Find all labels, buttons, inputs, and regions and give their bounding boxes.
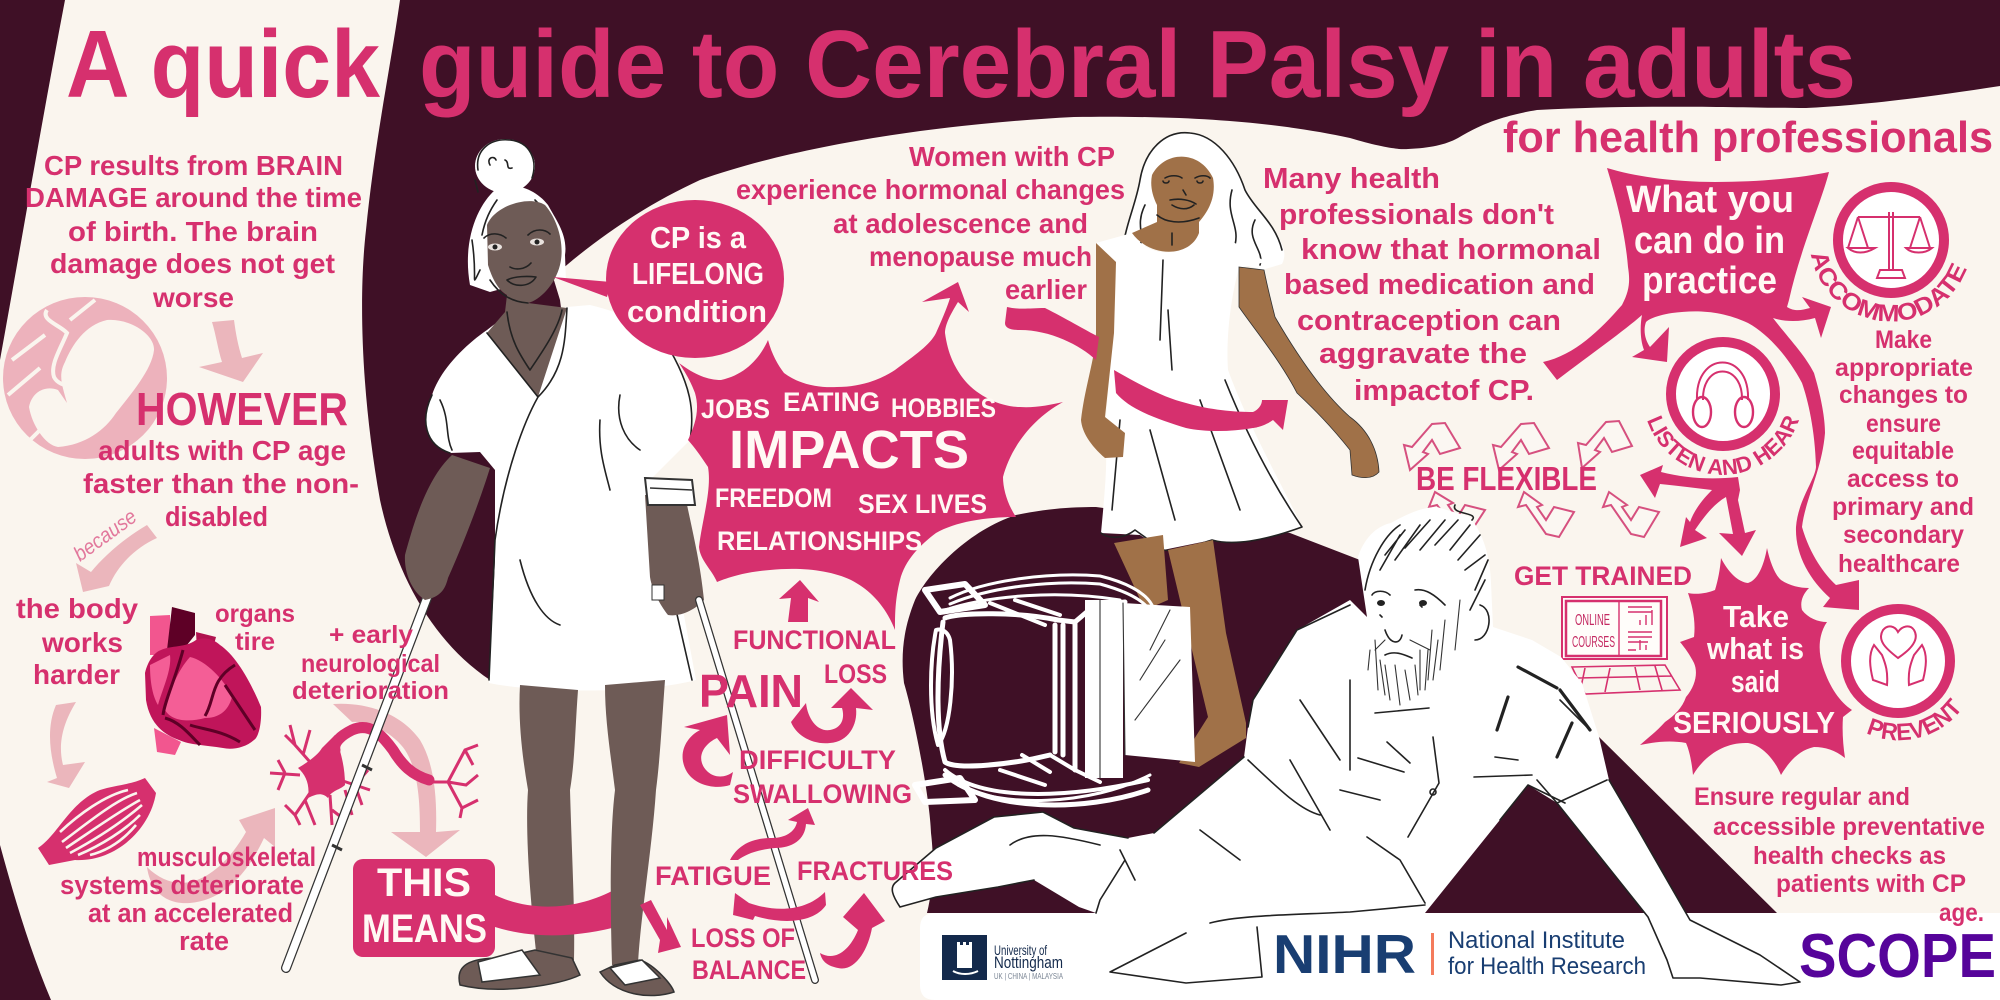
- burst: impacts: FREEDOM: [715, 483, 832, 513]
- text: make appropriate changes: access to: [1847, 465, 1959, 493]
- dress: [1096, 233, 1302, 550]
- text: musculoskeletal: rate: [179, 926, 229, 956]
- icon: prevent heart and hands: [1846, 609, 1950, 713]
- leg: right: [1168, 540, 1246, 767]
- logo: NIHR: National Institute: [1448, 927, 1625, 954]
- burst: take what is said seriously: what is: [1706, 631, 1804, 666]
- logo: NIHR: NIHR: [1273, 923, 1416, 985]
- text: adults age faster: faster than the non-: [83, 468, 359, 499]
- impacts flow list: DIFFICULTY: [739, 745, 896, 775]
- text: many health professionals: Many health: [1263, 163, 1440, 195]
- leg: left: [519, 685, 578, 960]
- text: women with CP: at adolescence and: [833, 208, 1088, 239]
- arrow: this means band: [495, 891, 612, 935]
- bubble: CP is a lifelong condition: [553, 200, 784, 358]
- burst: take what is said seriously: SERIOUSLY: [1673, 705, 1835, 740]
- text: CP results: damage does not get: [50, 248, 335, 279]
- text: make appropriate changes: secondary: [1843, 521, 1964, 549]
- text: organs tire: tire: [235, 628, 275, 656]
- logo: NIHR: for Health Research: [1448, 953, 1646, 980]
- text: early neurological deterioration: [292, 621, 449, 705]
- text: women with CP: earlier: [1005, 274, 1087, 305]
- arrow: because: [69, 505, 157, 592]
- man outline and clothing lines: [892, 605, 1800, 985]
- text: the body works harder: works: [41, 627, 123, 658]
- arm: left: [1081, 243, 1125, 458]
- text: ensure regular: Ensure regular and: [1694, 783, 1910, 811]
- text: make appropriate changes: healthcare: [1838, 550, 1960, 578]
- text: the body works harder: [16, 593, 138, 690]
- text: many health professionals: professionals don't: [1279, 199, 1554, 231]
- impacts flow list: [655, 580, 953, 985]
- label: get trained: GET TRAINED: [1514, 561, 1692, 591]
- text: adults age faster: adults with CP age: [98, 435, 346, 466]
- text: make appropriate changes: Make: [1875, 326, 1932, 354]
- figure: wheelchair: [915, 575, 1195, 805]
- burst: impacts: [679, 282, 1063, 630]
- burst: impacts: JOBS: [701, 394, 770, 424]
- impacts flow list: FRACTURES: [797, 856, 953, 886]
- impacts flow list: FUNCTIONAL: [733, 625, 896, 655]
- box: what you can do in practice: What you: [1626, 179, 1794, 221]
- text: CP results: DAMAGE around the time: [25, 182, 362, 213]
- box: this means: MEANS: [362, 907, 487, 951]
- sandals: [459, 950, 674, 996]
- text: early neurological deterioration: neurological: [301, 650, 440, 678]
- impacts flow list: PAIN: [699, 665, 803, 717]
- arc guides: [1647, 252, 1971, 740]
- text: make appropriate changes: equitable: [1852, 437, 1954, 465]
- text: ensure regular: accessible preventative: [1713, 813, 1985, 841]
- text: adults age faster: [83, 435, 359, 532]
- burst: take what is said seriously: [1640, 548, 1852, 775]
- text: many health professionals: know that hormonal: [1301, 234, 1601, 266]
- text: CP results: CP results from BRAIN: [44, 150, 343, 181]
- icon: laptop online courses: [1562, 597, 1680, 694]
- arrow: neuron to this means: [333, 704, 460, 857]
- text: make appropriate changes: changes to: [1839, 381, 1968, 409]
- box: this means: [353, 859, 495, 957]
- text: many health professionals: [1263, 163, 1601, 407]
- arm: left: [405, 455, 490, 600]
- arrow: down to however: [199, 320, 263, 382]
- arrow: because: because: [69, 505, 141, 566]
- impacts flow list: BALANCE: [692, 955, 806, 985]
- text: early neurological deterioration: deterioration: [292, 677, 449, 705]
- bubble: CP is a lifelong condition: condition: [627, 294, 767, 329]
- figure: woman with crutches: [286, 139, 815, 996]
- hair: [1123, 133, 1284, 270]
- text: ensure regular: [1694, 783, 1985, 927]
- text: many health professionals: contraception can: [1297, 305, 1561, 337]
- text: musculoskeletal: musculoskeletal: [137, 842, 316, 872]
- text: make appropriate changes: appropriate: [1835, 354, 1973, 382]
- icons: flexible arrows: [1404, 421, 1659, 537]
- logo band: [920, 913, 2000, 1000]
- arrow: up to impacts: [779, 580, 819, 622]
- dress lines: [426, 308, 692, 680]
- dress: [426, 305, 696, 690]
- text: ensure regular: age.: [1939, 899, 1984, 927]
- burst: impacts: RELATIONSHIPS: [717, 526, 922, 556]
- icon: listen headphones: [1671, 342, 1775, 446]
- crutch: left: [286, 577, 435, 968]
- text: musculoskeletal: at an accelerated: [88, 898, 293, 928]
- face and neck: [1132, 157, 1214, 252]
- text: women with CP: Women with CP: [909, 141, 1115, 172]
- text: CP results: worse: [152, 282, 234, 313]
- arm: right and hand: [1239, 267, 1379, 478]
- impacts flow list: SWALLOWING: [733, 779, 912, 809]
- arrow: hormonal: [1005, 307, 1288, 431]
- text: women with CP: [736, 141, 1125, 305]
- impacts flow list: LOSS: [824, 659, 887, 689]
- box: what you can do in practice: [1543, 168, 1859, 610]
- text: women with CP: menopause much: [869, 241, 1092, 272]
- box: what you can do in practice: can do in: [1634, 220, 1785, 262]
- arm: right with cuff: [645, 478, 704, 615]
- text: organs tire: organs: [215, 600, 295, 628]
- figure: woman with white hair: [1005, 133, 1379, 767]
- text: many health professionals: based medication and: [1284, 269, 1595, 301]
- hair: [468, 139, 566, 292]
- text: CP results: [25, 150, 362, 313]
- arrow: body to muscle: [47, 702, 85, 788]
- text: musculoskeletal: [60, 842, 316, 956]
- icon: muscle: [38, 778, 156, 865]
- arrows: three way: [1640, 465, 1756, 556]
- text: CP results: of birth. The brain: [68, 216, 318, 247]
- icon: laptop online courses: ONLINE: [1575, 612, 1610, 629]
- text: ensure regular: patients with CP: [1776, 870, 1966, 898]
- text: adults age faster: disabled: [165, 501, 268, 532]
- leg: left: [1114, 535, 1168, 610]
- text: make appropriate changes: primary and: [1832, 493, 1974, 521]
- icon: fetus: [3, 297, 167, 459]
- logo: University of Nottingham: UK | CHINA | MALAYSIA: [994, 972, 1064, 981]
- title: guide to Cerebral Palsy in adults: [419, 11, 1856, 118]
- arrow: this means to loss of balance: [640, 900, 681, 953]
- box: what you can do in practice: practice: [1642, 260, 1777, 302]
- impacts flow list: LOSS OF: [691, 923, 795, 953]
- text: ensure regular: health checks as: [1753, 842, 1946, 870]
- leg: right: [605, 680, 665, 965]
- label: listen and hear: LISTEN AND HEAR: [1647, 415, 1800, 475]
- bubble: CP is a lifelong condition: LIFELONG: [632, 256, 764, 291]
- text: early neurological deterioration: + early: [329, 621, 413, 649]
- man hair, face and beard: [1365, 505, 1489, 705]
- text: the body works harder: harder: [33, 659, 120, 690]
- label: accommodate: ACCOMMODATE: [1810, 254, 1967, 322]
- logo: University of Nottingham: [942, 935, 1064, 981]
- subtitle: for health professionals: [1503, 113, 1993, 162]
- title: A quick: [66, 11, 381, 118]
- text: many health professionals: impactof CP.: [1354, 375, 1534, 407]
- figure: man on floor: [892, 505, 1800, 985]
- text: musculoskeletal: systems deteriorate: [60, 870, 304, 900]
- icon: heart: [145, 607, 261, 755]
- burst: impacts: SEX LIVES: [858, 489, 987, 519]
- heading: however: HOWEVER: [136, 383, 348, 435]
- logo: University of Nottingham: Nottingham: [994, 953, 1063, 972]
- text: the body works harder: the body: [16, 593, 138, 624]
- burst: impacts: HOBBIES: [891, 393, 996, 423]
- head and chest: [487, 201, 567, 397]
- bubble: CP is a lifelong condition: CP is a: [650, 220, 747, 255]
- text: many health professionals: aggravate the: [1319, 338, 1527, 370]
- text: organs tire: [215, 600, 295, 656]
- box: this means: THIS: [377, 861, 471, 905]
- logo: University of Nottingham: University of: [994, 942, 1047, 958]
- impacts flow list: FATIGUE: [655, 861, 771, 891]
- arrow: muscle to neuron: [147, 808, 275, 903]
- face: [484, 230, 562, 370]
- label: be flexible: BE FLEXIBLE: [1416, 460, 1597, 497]
- label: prevent: PREVENT: [1867, 697, 1960, 740]
- icon: neuron: [270, 725, 478, 825]
- logo: NIHR: [1273, 923, 1646, 985]
- icon: accommodate scales: [1838, 187, 1944, 293]
- text: make appropriate changes: ensure: [1866, 410, 1941, 438]
- icon: laptop online courses: COURSES: [1572, 634, 1615, 651]
- burst: take what is said seriously: Take: [1723, 599, 1789, 634]
- crutch: right: [699, 600, 815, 980]
- text: women with CP: experience hormonal changes: [736, 174, 1125, 205]
- text: make appropriate changes: [1832, 326, 1974, 578]
- burst: take what is said seriously: said: [1731, 664, 1780, 699]
- burst: impacts: EATING: [783, 387, 880, 417]
- arrows: loops: [683, 715, 733, 787]
- burst: impacts: IMPACTS: [729, 420, 969, 480]
